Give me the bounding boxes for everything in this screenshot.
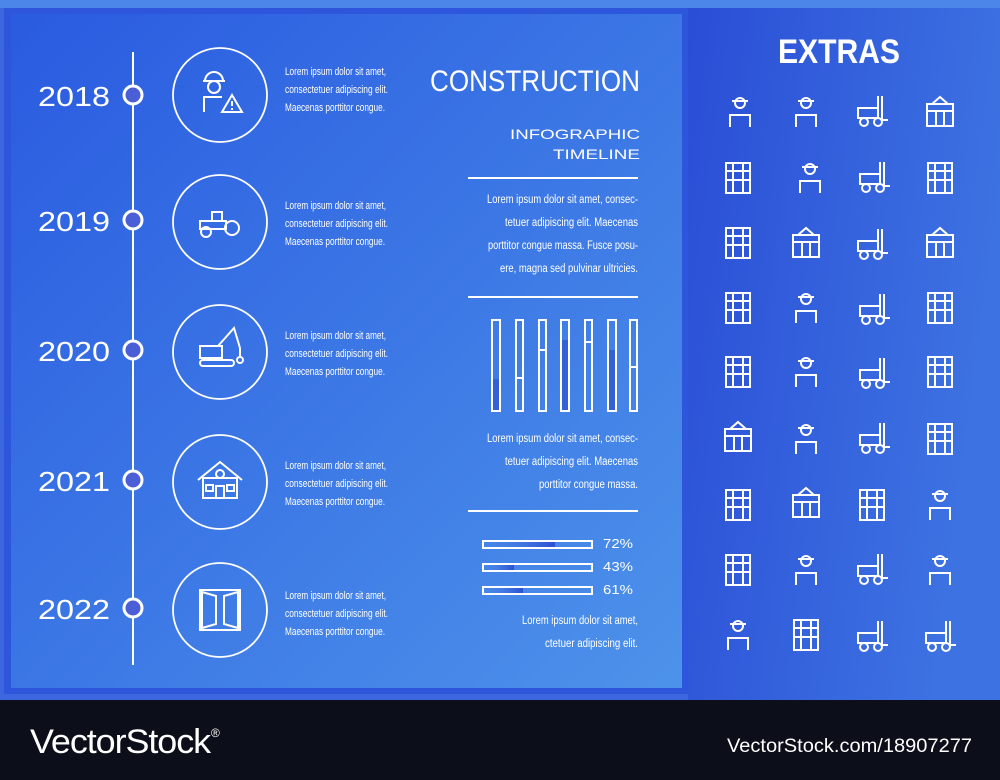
- vertical bar chart: [492, 320, 637, 411]
- timeline item 2021: consectetuer adipiscing elit.: [285, 478, 388, 490]
- timeline item 2018: Lorem ipsum dolor sit amet,: [285, 66, 386, 78]
- timeline item 2022: [38, 563, 388, 657]
- extras heading: EXTRAS: [778, 33, 900, 71]
- timeline item 2021: [38, 435, 388, 529]
- subtitle: INFOGRAPHIC: [510, 126, 640, 142]
- timeline item 2022: consectetuer adipiscing elit.: [285, 608, 388, 620]
- progress bars: 72%: [603, 536, 633, 551]
- extras panel: [688, 8, 1000, 700]
- timeline item 2019: Maecenas porttitor congue.: [285, 236, 385, 248]
- timeline item 2020: [38, 305, 388, 399]
- timeline item 2022: Maecenas porttitor congue.: [285, 626, 385, 638]
- progress bars: 43%: [603, 559, 633, 574]
- timeline axis: [132, 52, 134, 665]
- timeline item 2019: [38, 175, 388, 269]
- paragraph 2: tetuer adipiscing elit. Maecenas: [505, 456, 638, 468]
- main panel: [4, 8, 688, 694]
- paragraph 1: ere, magna sed pulvinar ultricies.: [500, 263, 638, 275]
- paragraph 3: Lorem ipsum dolor sit amet,: [522, 615, 638, 627]
- top strip: [0, 0, 1000, 8]
- paragraph 2: porttitor congue massa.: [539, 479, 638, 491]
- timeline item 2020: 2020: [38, 336, 110, 367]
- timeline item 2022: 2022: [38, 594, 110, 625]
- timeline item 2021: 2021: [38, 466, 110, 497]
- timeline item 2020: Maecenas porttitor congue.: [285, 366, 385, 378]
- progress bars: [483, 536, 633, 597]
- timeline item 2022: Lorem ipsum dolor sit amet,: [285, 590, 386, 602]
- timeline item 2020: Lorem ipsum dolor sit amet,: [285, 330, 386, 342]
- timeline item 2021: Maecenas porttitor congue.: [285, 496, 385, 508]
- subtitle: TIMELINE: [553, 146, 640, 162]
- paragraph 2: Lorem ipsum dolor sit amet, consec-: [487, 433, 638, 445]
- progress bars: 61%: [603, 582, 633, 597]
- title: CONSTRUCTION: [430, 65, 640, 98]
- paragraph 1: Lorem ipsum dolor sit amet, consec-: [487, 194, 638, 206]
- timeline item 2018: Maecenas porttitor congue.: [285, 102, 385, 114]
- footer bar: VectorStock.com/18907277: [727, 736, 972, 757]
- paragraph 1: tetuer adipiscing elit. Maecenas: [505, 217, 638, 229]
- timeline item 2021: Lorem ipsum dolor sit amet,: [285, 460, 386, 472]
- timeline item 2019: 2019: [38, 206, 110, 237]
- timeline item 2018: [38, 48, 388, 142]
- timeline item 2019: consectetuer adipiscing elit.: [285, 218, 388, 230]
- footer bar: VectorStock: [30, 723, 212, 761]
- footer bar: ®: [211, 726, 220, 740]
- timeline item 2019: Lorem ipsum dolor sit amet,: [285, 200, 386, 212]
- paragraph 3: ctetuer adipiscing elit.: [545, 638, 638, 650]
- timeline item 2018: consectetuer adipiscing elit.: [285, 84, 388, 96]
- icon grid: [725, 96, 956, 651]
- footer bar: [0, 700, 1000, 780]
- timeline item 2020: consectetuer adipiscing elit.: [285, 348, 388, 360]
- timeline item 2018: 2018: [38, 81, 110, 112]
- paragraph 1: porttitor congue massa. Fusce posu-: [488, 240, 638, 252]
